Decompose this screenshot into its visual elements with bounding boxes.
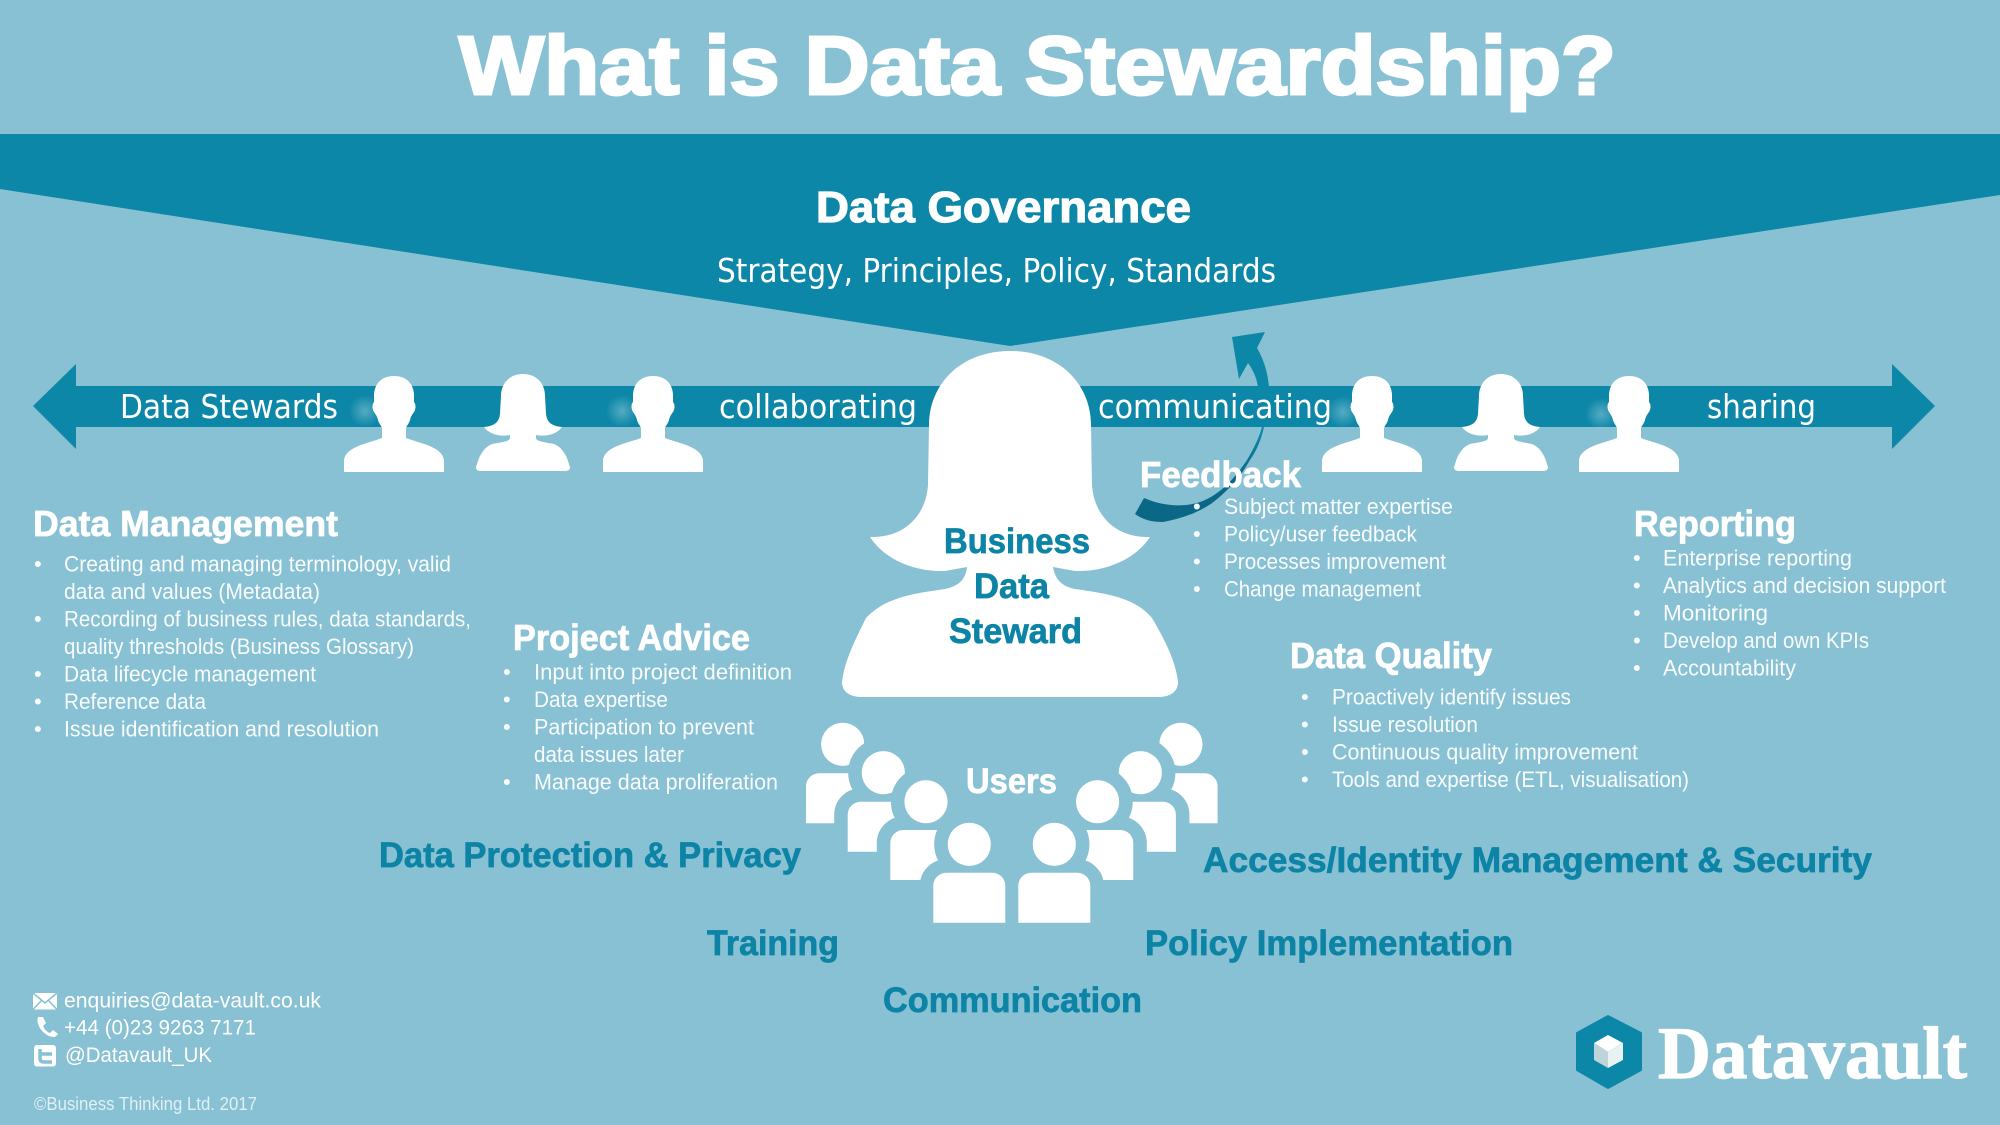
text: governance subtitle: Strategy, Principles, Policy, Standards: [717, 251, 1276, 290]
list: data quality items: •: [1301, 712, 1309, 737]
heading: data management: Data Management: [33, 503, 338, 544]
list: reporting items: Accountability: [1663, 656, 1796, 680]
text: phone: +44 (0)23 9263 7171: [64, 1016, 256, 1040]
list: project advice items: •: [503, 714, 511, 740]
list: data management items: data and values (Metadata): [64, 579, 320, 604]
list: data management items: •: [34, 716, 42, 742]
panel: contact details: [33, 990, 321, 1067]
icon: data steward woman 2: [1454, 374, 1548, 471]
list: project advice items: Input into project definition: [534, 660, 792, 684]
label: collaborating: collaborating: [719, 387, 917, 426]
list: feedback items: Subject matter expertise: [1224, 494, 1453, 519]
icon: hexagon cube: [1577, 1016, 1641, 1088]
heading: communication: Communication: [883, 981, 1142, 1020]
list: data quality items: •: [1301, 740, 1309, 764]
list: data management items: •: [34, 689, 42, 714]
list: project advice items: [503, 660, 792, 794]
list: feedback items: Processes improvement: [1224, 549, 1446, 574]
label: users: Users: [966, 762, 1057, 801]
list: project advice items: data issues later: [534, 742, 684, 767]
list: reporting items: •: [1633, 600, 1641, 626]
panel: reporting: [1633, 503, 1946, 680]
list: project advice items: Data expertise: [534, 687, 668, 712]
list: data management items: •: [34, 606, 42, 632]
list: reporting items: •: [1633, 656, 1641, 680]
icon: data steward man 4: [1579, 376, 1679, 472]
list: data quality items: •: [1301, 684, 1309, 710]
heading: data quality: Data Quality: [1290, 635, 1492, 676]
text: copyright: ©Business Thinking Ltd. 2017: [34, 1094, 257, 1114]
heading: feedback: Feedback: [1140, 454, 1302, 495]
list: feedback items: •: [1193, 494, 1201, 519]
list: data quality items: Proactively identify issues: [1332, 684, 1571, 710]
heading: training: Training: [707, 924, 839, 963]
icon: data steward man 2: [603, 376, 703, 472]
icon: twitter: [34, 1045, 56, 1066]
list: data management items: Data lifecycle management: [64, 662, 316, 686]
panel: data management: [33, 503, 471, 742]
icon: data steward woman 1: [476, 374, 570, 471]
list: reporting items: •: [1633, 573, 1641, 598]
heading: project advice: Project Advice: [513, 617, 750, 658]
list: data quality items: [1301, 684, 1689, 792]
label: data stewards: Data Stewards: [120, 387, 338, 426]
list: data management items: •: [34, 662, 42, 686]
list: feedback items: •: [1193, 576, 1201, 602]
list: data management items: •: [34, 552, 42, 576]
label: business data steward: Business: [944, 522, 1090, 561]
list: feedback items: [1193, 494, 1453, 602]
list: feedback items: •: [1193, 522, 1201, 546]
list: data quality items: Issue resolution: [1332, 712, 1478, 737]
arrow: data stewards double-headed bar: [33, 364, 1935, 449]
heading: access identity management and security: Access/Identity Management & Security: [1203, 841, 1873, 880]
list: reporting items: [1633, 546, 1946, 680]
label: communicating: communicating: [1098, 387, 1332, 426]
list: reporting items: •: [1633, 546, 1641, 570]
logo wordmark: Datavault: [1658, 1013, 1967, 1095]
heading: data protection and privacy: Data Protection & Privacy: [379, 836, 802, 875]
list: reporting items: Enterprise reporting: [1663, 546, 1852, 570]
list: data management items: quality thresholds (Business Glossary): [64, 634, 414, 659]
list: data management items: Creating and managing terminology, valid: [64, 552, 451, 576]
list: feedback items: Policy/user feedback: [1224, 522, 1418, 546]
list: data management items: Issue identification and resolution: [64, 716, 379, 742]
list: data quality items: Tools and expertise (ETL, visualisation): [1332, 767, 1689, 792]
label: sharing: sharing: [1707, 387, 1816, 426]
list: data management items: [34, 552, 471, 742]
panel: data quality: [1290, 635, 1689, 792]
heading: reporting: Reporting: [1634, 503, 1796, 544]
panel: feedback: [1140, 454, 1453, 602]
panel: project advice: [503, 617, 792, 794]
list: project advice items: Participation to prevent: [534, 714, 754, 740]
icon: data steward man 1: [344, 376, 444, 472]
panel: data governance banner: [0, 134, 2000, 346]
arrow: feedback curved arrow: [1135, 332, 1269, 522]
heading: data governance: Data Governance: [816, 183, 1191, 232]
heading: policy implementation: Policy Implementation: [1145, 924, 1513, 963]
text: email: enquiries@data-vault.co.uk: [64, 990, 321, 1012]
list: feedback items: •: [1193, 549, 1201, 574]
label: business data steward: Data: [974, 567, 1050, 606]
list: reporting items: •: [1633, 628, 1641, 653]
list: project advice items: •: [503, 687, 511, 712]
icon: phone: [37, 1017, 58, 1037]
title: What is Data Stewardship?: [459, 19, 1616, 112]
logo: datavault: [1577, 1013, 1967, 1095]
list: data quality items: •: [1301, 767, 1309, 792]
list: project advice items: •: [503, 770, 511, 794]
text: twitter handle: @Datavault_UK: [65, 1044, 212, 1067]
list: feedback items: Change management: [1224, 576, 1421, 602]
label: business data steward: Steward: [949, 612, 1082, 651]
icon: data steward man 3: [1322, 376, 1422, 472]
list: reporting items: Analytics and decision support: [1663, 573, 1946, 598]
list: data management items: Recording of business rules, data standards,: [64, 606, 471, 632]
label: business data steward: [944, 522, 1090, 651]
list: project advice items: •: [503, 660, 511, 684]
icon: users group: [806, 723, 1218, 923]
icon: business data steward figure: [842, 351, 1178, 697]
list: reporting items: Develop and own KPIs: [1663, 628, 1869, 653]
list: reporting items: Monitoring: [1663, 600, 1768, 626]
icon: envelope: [33, 993, 57, 1010]
list: data quality items: Continuous quality improvement: [1332, 740, 1638, 764]
list: data management items: Reference data: [64, 689, 207, 714]
list: project advice items: Manage data proliferation: [534, 770, 778, 794]
